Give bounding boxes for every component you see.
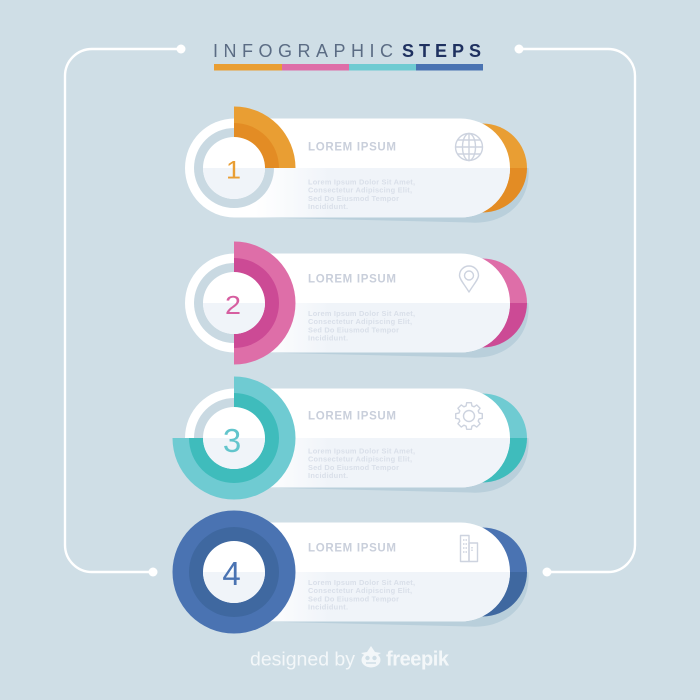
footer credit xyxy=(250,646,450,670)
body text: Sed Do Eiusmod Tempor xyxy=(308,326,399,334)
title: INFOGRAPHIC xyxy=(213,41,393,61)
title: STEPS xyxy=(402,41,481,61)
left frame connector xyxy=(65,44,186,576)
number: 2 xyxy=(225,290,241,320)
body text xyxy=(308,309,415,343)
panel: step 2 xyxy=(185,242,529,364)
body text: Incididunt. xyxy=(308,603,348,612)
body text xyxy=(308,578,415,612)
icon: globe xyxy=(456,134,482,160)
right frame connector xyxy=(514,44,635,576)
ring xyxy=(172,510,296,634)
heading: LOREM IPSUM xyxy=(308,274,396,286)
panel: step 4 xyxy=(172,510,529,634)
body text xyxy=(308,178,415,211)
body text: Lorem Ipsum Dolor Sit Amet, xyxy=(308,178,415,186)
heading: LOREM IPSUM xyxy=(308,543,396,555)
body text: Sed Do Eiusmod Tempor xyxy=(308,594,399,604)
icon: building xyxy=(460,536,478,562)
number: 3 xyxy=(223,422,241,459)
panel: step 1 xyxy=(185,106,529,223)
body text: Incididunt. xyxy=(308,334,348,343)
icon: gear xyxy=(456,403,482,429)
title colour bar xyxy=(214,64,483,70)
number: 4 xyxy=(222,555,241,592)
icon: freepik logo xyxy=(361,646,381,668)
body text: Sed Do Eiusmod Tempor xyxy=(308,463,399,472)
body text: Consectetur Adipiscing Elit, xyxy=(308,586,412,595)
body text: Incididunt. xyxy=(308,471,348,480)
body text: Lorem Ipsum Dolor Sit Amet, xyxy=(308,446,415,456)
wedge xyxy=(172,376,296,500)
body text xyxy=(308,446,415,480)
body text: Consectetur Adipiscing Elit, xyxy=(308,186,412,195)
icon: map pin xyxy=(460,266,478,292)
heading: LOREM IPSUM xyxy=(308,410,396,422)
title xyxy=(213,41,481,61)
footer credit: designed by xyxy=(250,648,355,670)
panel: step 3 xyxy=(172,376,529,500)
number: 1 xyxy=(226,156,241,184)
wedge xyxy=(234,106,296,168)
body text: Sed Do Eiusmod Tempor xyxy=(308,194,399,203)
footer credit: freepik xyxy=(386,648,450,670)
body text: Lorem Ipsum Dolor Sit Amet, xyxy=(308,578,415,587)
body text: Consectetur Adipiscing Elit, xyxy=(308,317,412,326)
body text: Consectetur Adipiscing Elit, xyxy=(308,455,412,464)
heading: LOREM IPSUM xyxy=(308,142,396,154)
body text: Incididunt. xyxy=(308,202,348,211)
body text: Lorem Ipsum Dolor Sit Amet, xyxy=(308,309,415,318)
wedge xyxy=(234,242,295,364)
